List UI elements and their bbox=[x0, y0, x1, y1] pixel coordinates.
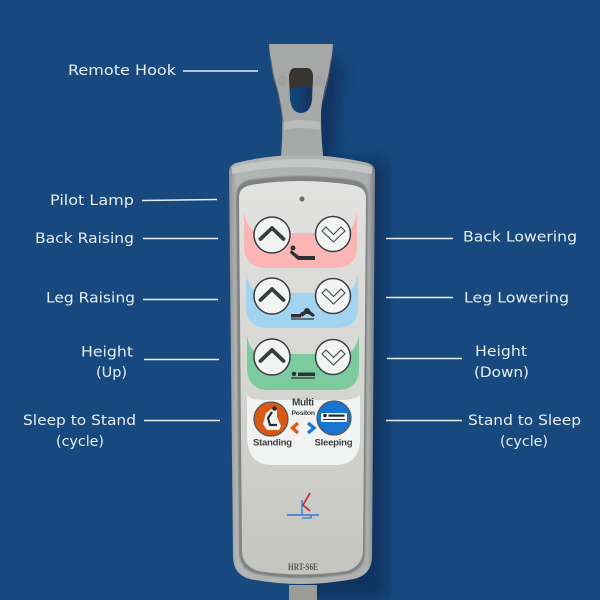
standing label: Standing bbox=[253, 438, 292, 448]
leg lowering button bbox=[316, 278, 350, 314]
label: stand to sleep bbox=[386, 413, 581, 450]
icon: bed legs raised bbox=[291, 308, 315, 319]
power cable bbox=[289, 585, 317, 600]
label: height up bbox=[81, 344, 219, 381]
label: leg lowering: Leg Lowering bbox=[464, 290, 569, 306]
back lowering button bbox=[316, 216, 350, 252]
remote hook bbox=[269, 44, 333, 156]
left arrow bbox=[292, 423, 298, 433]
pink band bbox=[244, 212, 357, 268]
label: height up: (Up) bbox=[96, 365, 127, 381]
multi position label: Positon bbox=[292, 410, 315, 417]
remote shadow bbox=[300, 60, 386, 600]
label: height down: Height bbox=[475, 344, 527, 360]
model number: HRT-S6E bbox=[288, 562, 318, 572]
multi position label: Multi bbox=[292, 398, 314, 408]
white band bbox=[247, 395, 360, 465]
pilot lamp bbox=[300, 196, 304, 202]
label: height down: (Down) bbox=[474, 365, 529, 381]
icon: bed flat bbox=[291, 372, 315, 378]
icon: bed back raised bbox=[290, 246, 315, 260]
height up button bbox=[254, 339, 290, 375]
sleeping button bbox=[317, 401, 351, 435]
multi position label bbox=[292, 398, 315, 417]
sleeping label: Sleeping bbox=[314, 438, 353, 448]
logo bbox=[287, 493, 319, 518]
right arrow bbox=[308, 423, 314, 433]
standing button bbox=[254, 402, 288, 436]
label: sleep to stand bbox=[23, 413, 220, 450]
label: back raising: Back Raising bbox=[35, 231, 134, 247]
back raising button bbox=[254, 217, 290, 253]
label: stand to sleep: (cycle) bbox=[500, 434, 548, 450]
label: stand to sleep: Stand to Sleep bbox=[468, 413, 581, 429]
label: leg raising: Leg Raising bbox=[46, 290, 135, 306]
label: pilot lamp: Pilot Lamp bbox=[50, 193, 134, 209]
blue band bbox=[246, 274, 358, 328]
label: sleep to stand: (cycle) bbox=[56, 434, 104, 450]
label: remote hook: Remote Hook bbox=[68, 63, 177, 79]
label: back lowering: Back Lowering bbox=[463, 230, 577, 246]
label: height up: Height bbox=[81, 344, 133, 360]
leg raising button bbox=[254, 278, 290, 314]
label: height down bbox=[387, 344, 529, 381]
height down button bbox=[316, 340, 350, 374]
remote body bbox=[229, 155, 375, 584]
label: sleep to stand: Sleep to Stand bbox=[23, 413, 136, 429]
green band bbox=[247, 335, 359, 390]
